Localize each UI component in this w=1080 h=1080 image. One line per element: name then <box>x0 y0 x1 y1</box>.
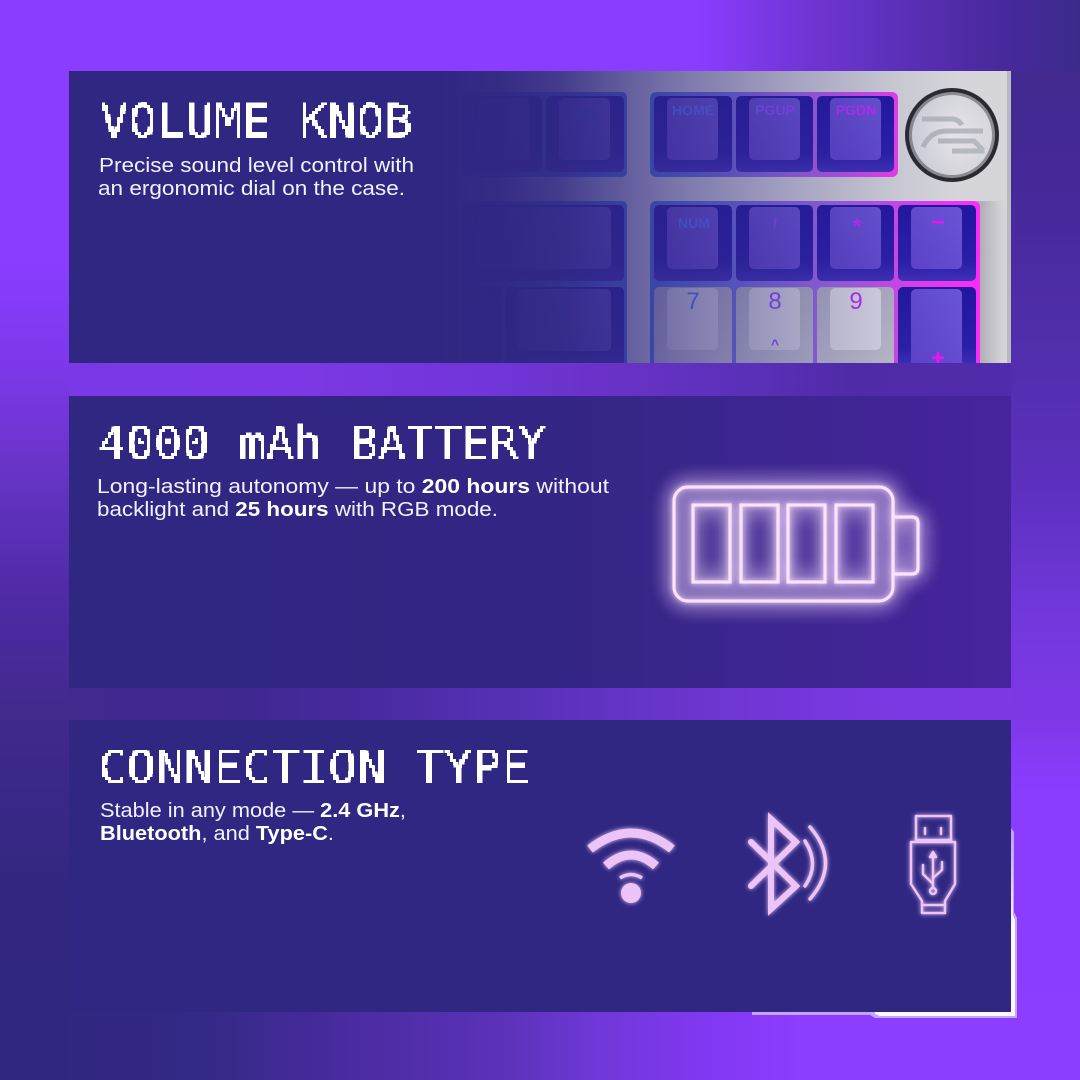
icon: bluetooth <box>751 819 826 909</box>
key legends: ⟵ <box>535 211 555 227</box>
key legends: PRTSC <box>479 107 527 123</box>
text: volume knob description: Precise sound level control with <box>99 154 414 177</box>
key legends: PGUP <box>755 102 795 118</box>
key legends <box>572 106 944 363</box>
key legends: * <box>853 214 862 239</box>
key legends: + <box>931 345 945 372</box>
key legends: ^ <box>771 336 779 352</box>
icon: usb <box>911 816 955 913</box>
keyboard photo <box>510 71 1011 363</box>
volume knob dial <box>905 88 999 182</box>
key legends: / <box>773 215 777 231</box>
key legends: − <box>931 209 945 236</box>
text: connection description: Bluetooth , and Type-C. <box>100 822 334 845</box>
key legends: 7 <box>686 288 700 315</box>
light edge behind connection panel <box>752 828 1017 1018</box>
icon: neon battery <box>674 487 918 601</box>
key legends: \ | <box>552 297 564 313</box>
panel: volume knob <box>69 71 1011 372</box>
text: volume knob description <box>98 154 414 200</box>
key legends: 8 <box>768 288 782 315</box>
text: battery description: backlight and 25 hours with RGB mode. <box>97 498 498 521</box>
text: connection description <box>100 799 406 845</box>
text: battery description: Long-lasting autonomy — up to 200 hours without <box>97 475 609 498</box>
panel: battery <box>69 396 1011 688</box>
key legends: 9 <box>849 288 863 315</box>
text: volume knob description: an ergonomic dial on the case. <box>98 177 405 200</box>
key legends: NUM <box>678 215 710 231</box>
heading: volume knob: VOLUME KNOB <box>100 95 413 148</box>
heading: battery: 4000 mAh BATTERY <box>98 417 546 470</box>
icon: wifi <box>590 833 672 903</box>
panel: connection type <box>69 720 1011 1012</box>
key legends: HOME <box>672 102 714 118</box>
heading: connection type: CONNECTION TYPE <box>98 741 530 794</box>
keys <box>534 96 976 363</box>
key legends: PGDN <box>836 102 876 118</box>
key legends: DEL <box>571 107 599 123</box>
text: connection description: Stable in any mode — 2.4 GHz, <box>100 799 406 822</box>
text: battery description <box>97 475 609 521</box>
